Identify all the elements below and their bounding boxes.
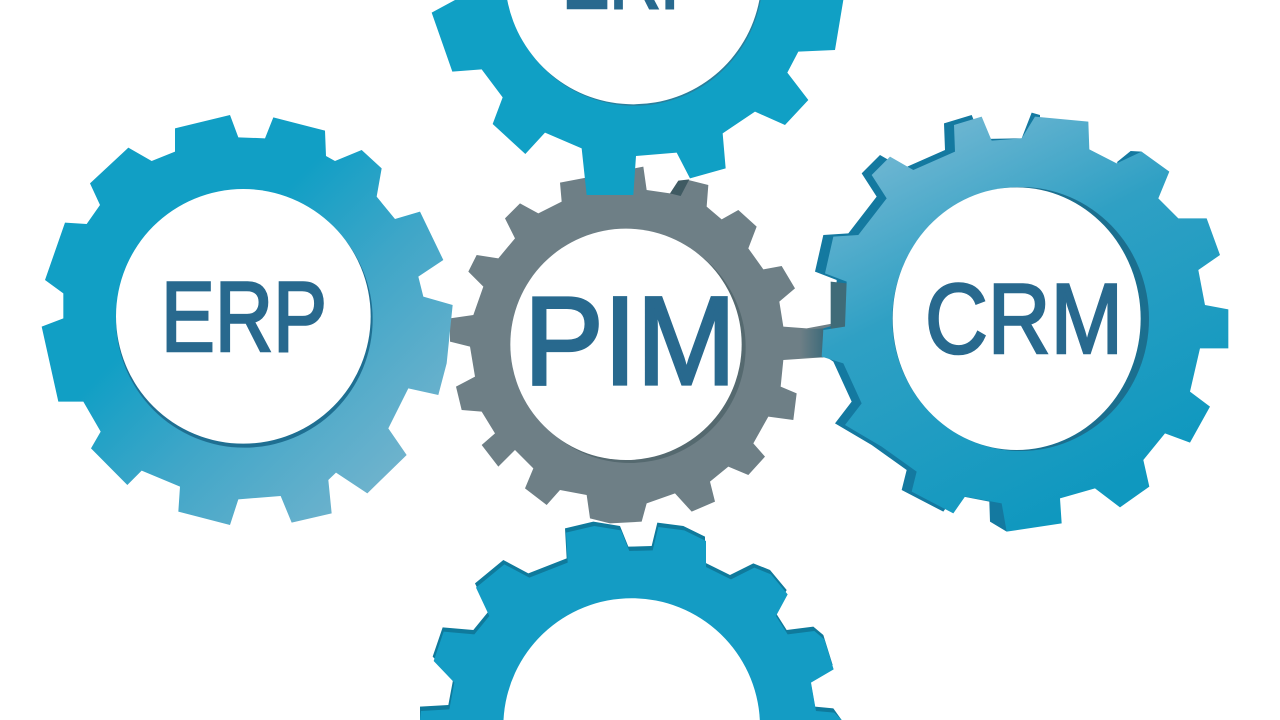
gear: top ERP (partially cropped) [432,0,843,195]
gear: CRM right [800,113,1228,532]
label: PIM: PIM [524,272,736,411]
gear: PIM center [450,167,833,523]
gear: bottom (partially cropped) [420,522,842,720]
label: CRM: CRM [925,263,1123,374]
gear: ERP left [42,115,453,525]
label: ERP: ERP [161,261,327,372]
